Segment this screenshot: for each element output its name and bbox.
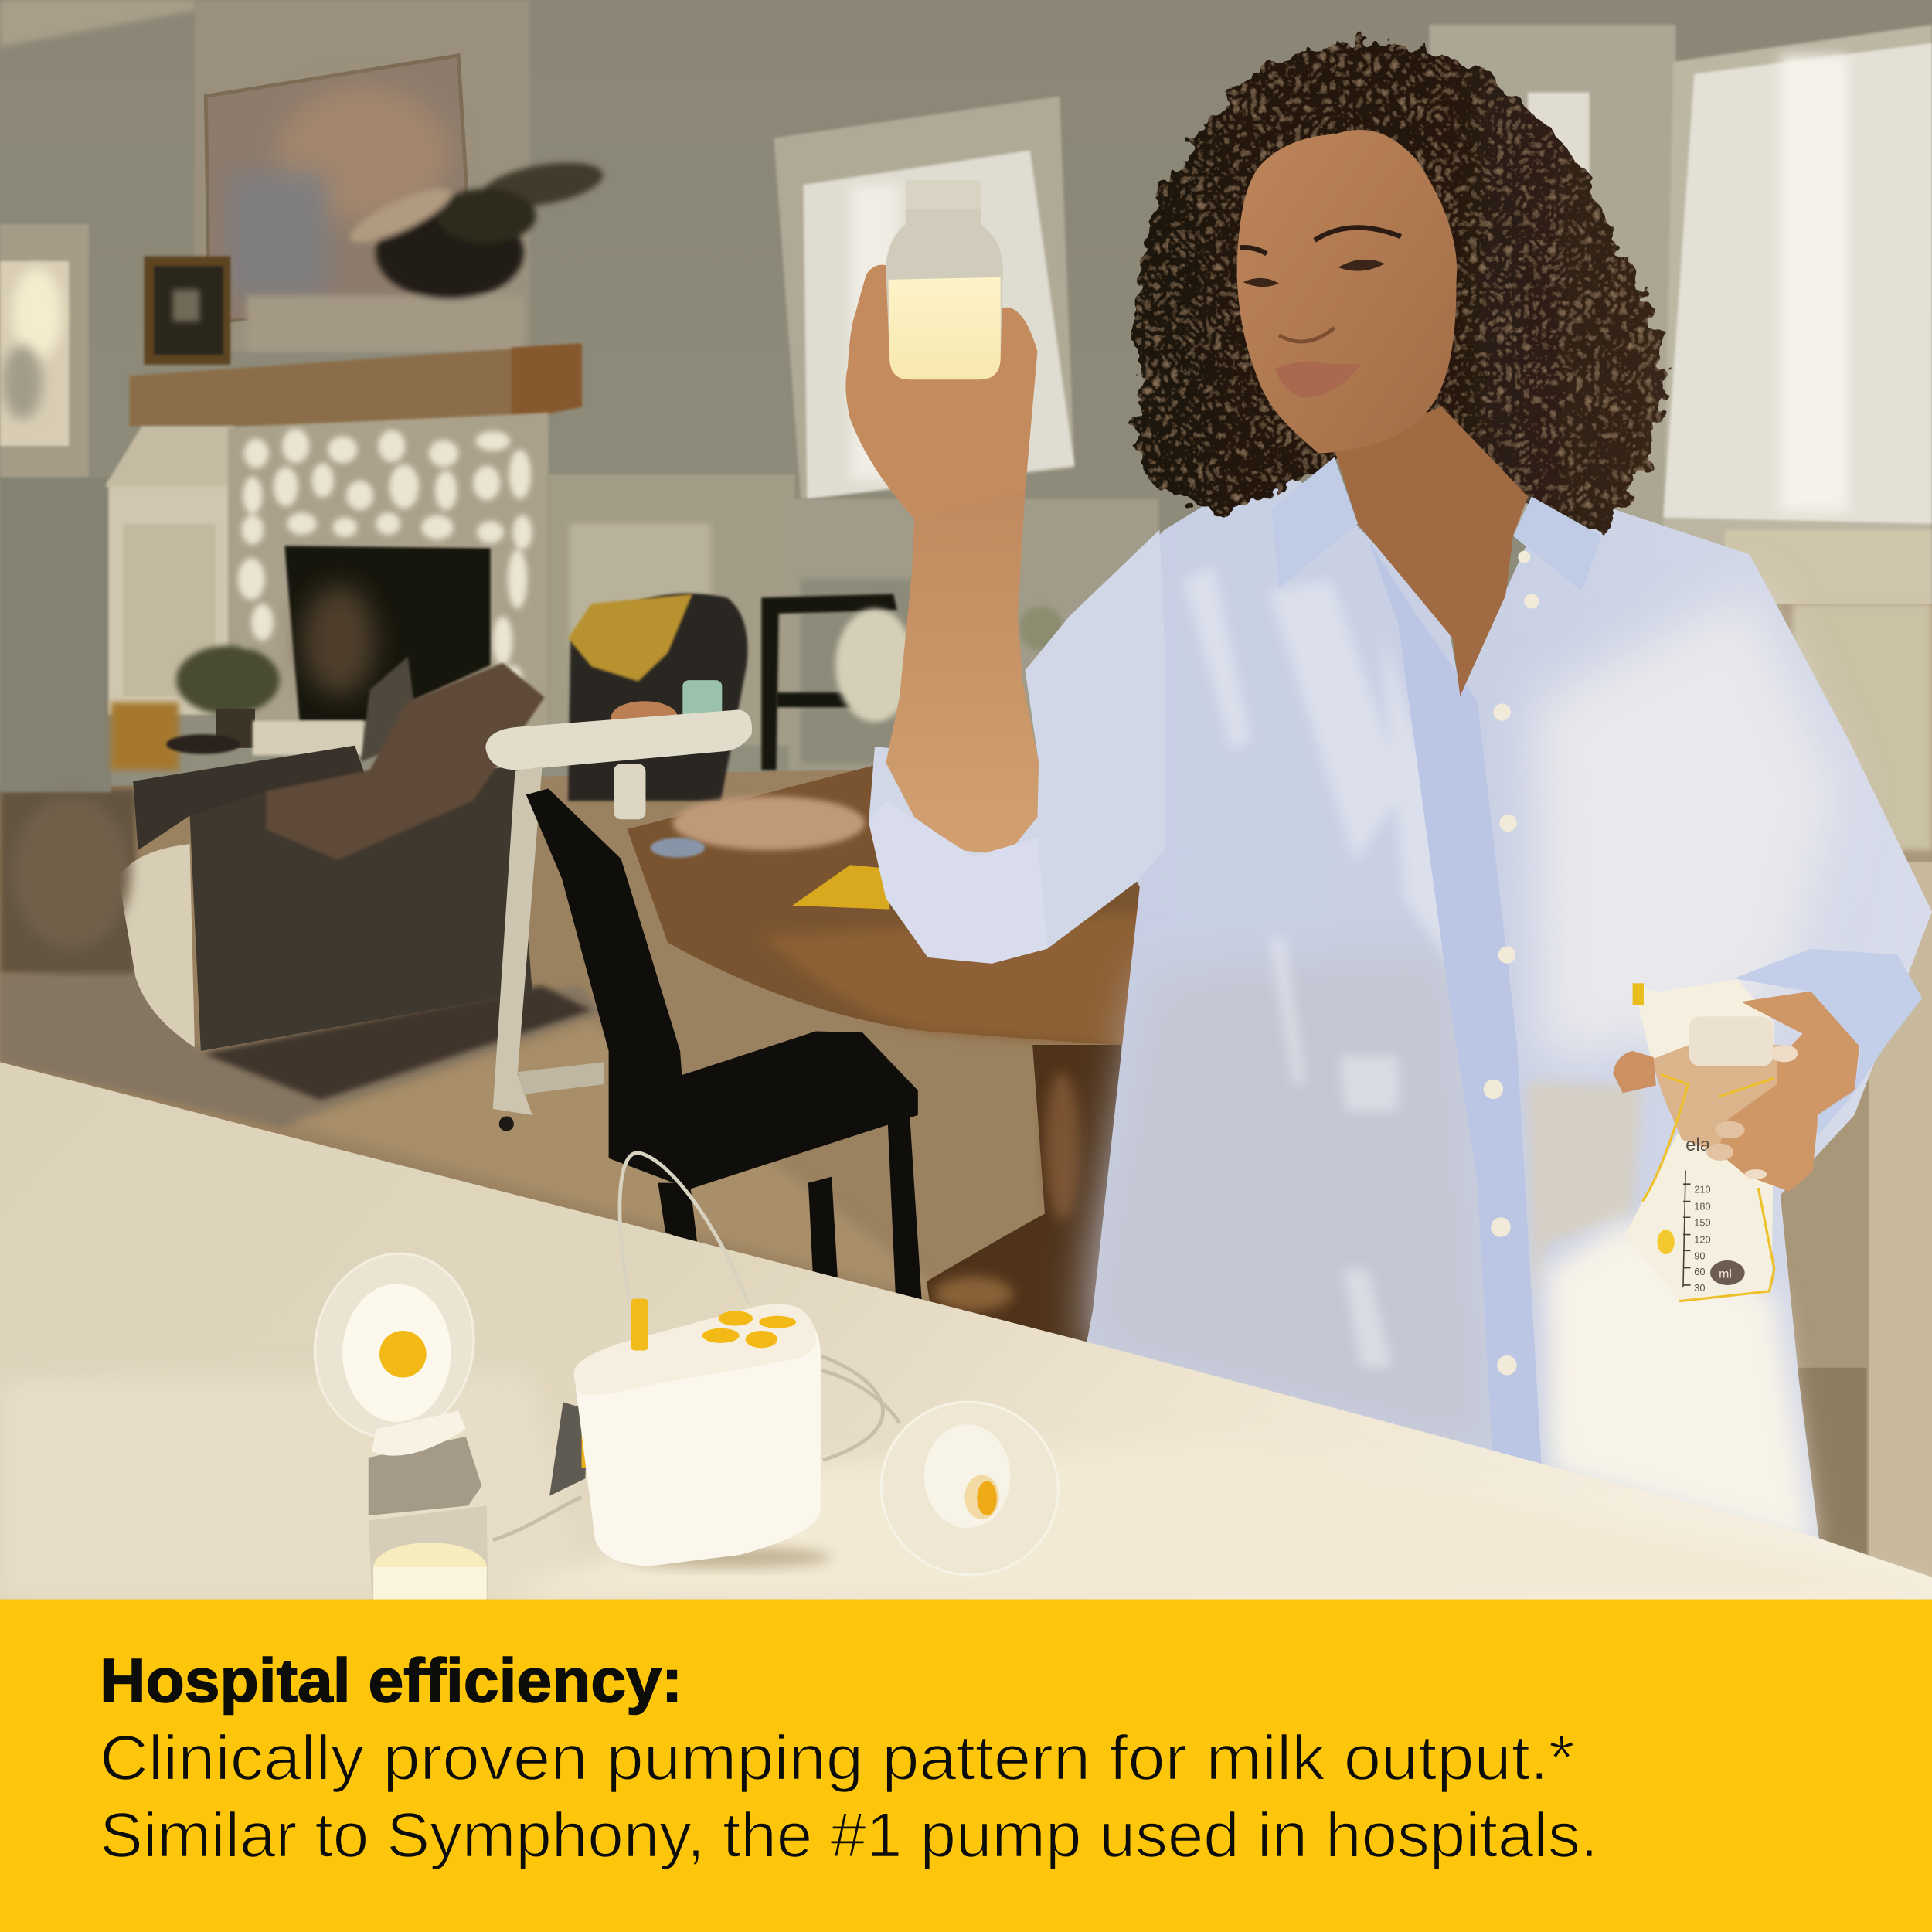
kitchen counter: [0, 1062, 1932, 1600]
yellow port: [631, 1298, 648, 1350]
hair: [1134, 42, 1664, 532]
pouf: [12, 796, 131, 949]
bag scale: 30: [1694, 1282, 1705, 1294]
pump motor unit: [549, 1298, 821, 1566]
bag yellow dot: [1657, 1230, 1675, 1254]
shirt sun streaks: [1183, 566, 1466, 1368]
table pedestal: [927, 1045, 1121, 1345]
raised sleeve and cuff: [869, 530, 1165, 964]
small frame on mantel: [145, 257, 230, 365]
woman: [845, 42, 1932, 1555]
black dining chair: [526, 788, 922, 1300]
white fireplace pilaster: [105, 427, 234, 715]
centre window: [774, 96, 1074, 499]
neck and chest: [1335, 406, 1528, 696]
floor: [0, 764, 1146, 1393]
bag scale: 180: [1694, 1201, 1711, 1213]
left window: [0, 224, 89, 477]
bag number tab: [1633, 983, 1644, 1005]
left wall panel: [0, 478, 111, 792]
bag scale: 210: [1694, 1183, 1711, 1195]
bag scale: 150: [1694, 1216, 1711, 1228]
bag brand text: ela: [1685, 1134, 1711, 1155]
wainscot panel: [549, 474, 1158, 770]
bag yellow seal lines: [1642, 1074, 1774, 1301]
collection bottle: [369, 1411, 488, 1600]
floor sunlit strip: [290, 1022, 961, 1306]
bag scale: 60: [1694, 1266, 1705, 1277]
firebox: [284, 546, 491, 721]
pump top cap: [574, 1304, 816, 1395]
bag scale: 120: [1694, 1234, 1711, 1246]
pump body: [574, 1318, 821, 1566]
mantel plant: [247, 155, 606, 351]
bag flange: [1689, 1016, 1773, 1066]
caption text: [100, 1723, 1598, 1871]
milk bottle: [886, 180, 1003, 379]
right eyebrow: [1315, 227, 1401, 240]
framed picture: [206, 56, 473, 323]
bag scale: [1683, 1171, 1711, 1294]
wooden mantel: [129, 344, 582, 427]
control buttons: [702, 1311, 796, 1348]
right breast shield: [862, 1383, 1078, 1595]
milk storage bag: [1625, 980, 1781, 1301]
sofa: [118, 657, 545, 1051]
lower hand: [1613, 991, 1859, 1192]
shirt shaded lower torso: [1090, 949, 1491, 1454]
counter sun patch: [0, 1374, 591, 1600]
shirt placket: [1369, 541, 1542, 1464]
tag yellow strip: [582, 1413, 589, 1468]
bag ml bubble: ml: [1719, 1267, 1732, 1281]
caption text: Similar to Symphony, the #1 pump used in hospitals.: [100, 1801, 1598, 1871]
ceiling edge: [0, 0, 197, 47]
raised forearm: [886, 492, 1039, 855]
breast pump set on counter: [298, 1153, 1078, 1600]
plant pot by fireplace: [111, 645, 280, 770]
shirt body: [1029, 462, 1932, 1555]
chimney breast: [195, 0, 530, 351]
nose: [1279, 328, 1335, 342]
rug: [0, 974, 604, 1128]
shirt warm shade under hand: [1528, 1082, 1641, 1306]
shirt sunlit right side: [1534, 591, 1836, 1060]
pump side tag: [549, 1402, 588, 1496]
high chair: [485, 594, 752, 1131]
right eye: [1338, 260, 1385, 271]
bag neck amber: [1651, 1045, 1781, 1152]
pump shadow: [622, 1546, 832, 1569]
face: [1237, 130, 1457, 454]
right windows with curtains: [1429, 25, 1932, 1590]
back chair and flowers: [761, 594, 1063, 770]
raised hand: [845, 265, 1037, 519]
lower sleeve cuff: [1733, 949, 1922, 1136]
left eye: [1243, 278, 1279, 287]
shirt collar: [1271, 457, 1602, 591]
dining table: [628, 765, 1146, 1047]
sleeve cuff over arm: [869, 801, 1047, 964]
caption heading: Hospital efficiency:: [100, 1646, 682, 1715]
stone fireplace surround: [228, 413, 549, 727]
lips: [1275, 362, 1362, 398]
bag scale: 90: [1694, 1250, 1705, 1261]
left eyebrow: [1240, 247, 1267, 253]
bag ml bubble: [1710, 1260, 1745, 1285]
left breast shield: [298, 1239, 491, 1452]
counter bright patch: [493, 1441, 1932, 1600]
caption text: Clinically proven pumping pattern for milk output.*: [100, 1723, 1575, 1793]
tubing: [620, 1153, 748, 1304]
shirt sunlit hem: [1546, 1219, 1814, 1546]
shirt buttons: [1484, 551, 1539, 1375]
yellow caption band: [0, 1600, 1932, 1932]
rug shadow: [203, 986, 591, 1100]
left dim floor zone: [0, 788, 135, 986]
